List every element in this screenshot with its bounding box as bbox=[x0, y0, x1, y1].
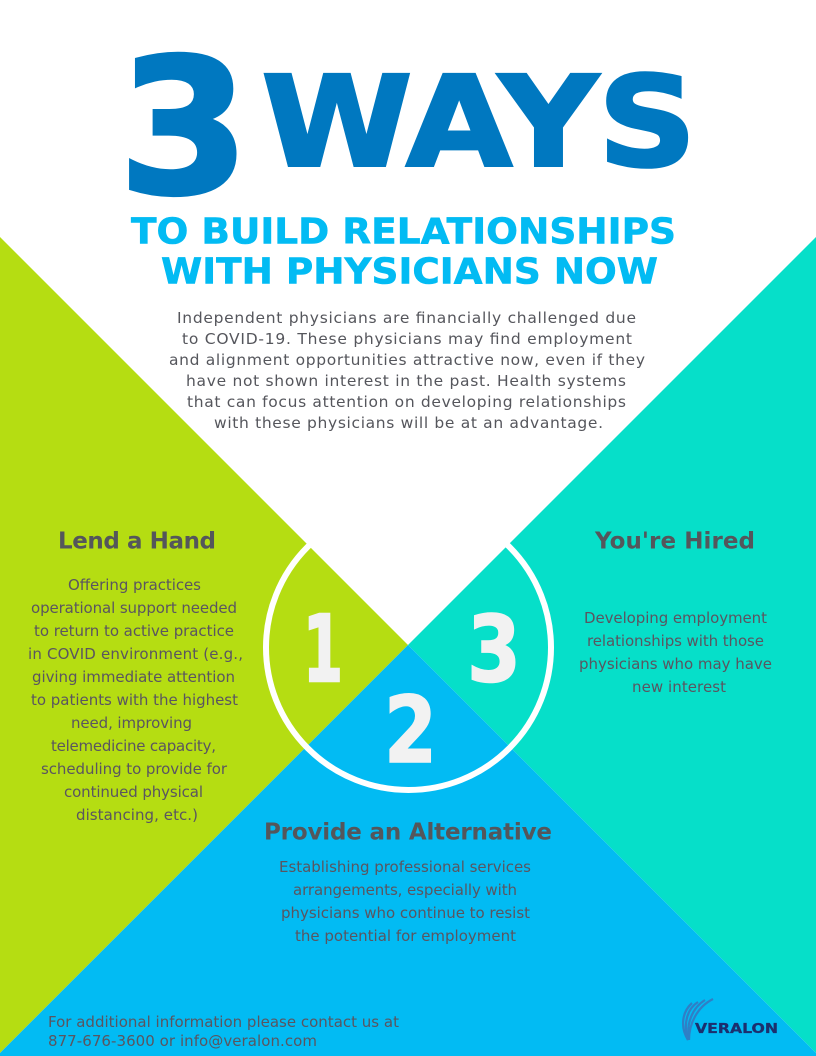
text block: lend a hand: distancing, etc.) bbox=[76, 806, 198, 824]
text block: lend a hand: to patients with the highest bbox=[31, 691, 238, 709]
text block: lend a hand: in COVID environment (e.g., bbox=[28, 645, 243, 663]
text block: you're hired: new interest bbox=[632, 678, 726, 696]
title: 3 ways: 3 bbox=[118, 20, 250, 238]
contact info: 877-676-3600 or info@veralon.com bbox=[48, 1032, 317, 1050]
text block: provide an alternative: Establishing professional services bbox=[279, 858, 531, 876]
text block: lend a hand: giving immediate attention bbox=[32, 668, 235, 686]
text block: lend a hand: need, improving bbox=[71, 714, 192, 732]
contact info: For additional information please contact us at bbox=[48, 1013, 399, 1031]
text block: lend a hand bbox=[28, 576, 243, 824]
text block: provide an alternative: arrangements, especially with bbox=[293, 881, 517, 899]
text block: you're hired: Developing employment bbox=[584, 609, 767, 627]
panel: lend a hand green triangle bbox=[0, 237, 408, 1053]
heading: provide an alternative: Provide an Alternative bbox=[264, 820, 552, 846]
text block: provide an alternative bbox=[279, 858, 531, 945]
text block: lend a hand: to return to active practice bbox=[34, 622, 234, 640]
title: 3 ways: WAYS bbox=[262, 50, 696, 196]
text block: lend a hand: Offering practices bbox=[68, 576, 201, 594]
circle ring bbox=[266, 505, 551, 790]
subtitle: WITH PHYSICIANS NOW bbox=[161, 252, 658, 292]
panel: you're hired turquoise triangle bbox=[408, 237, 816, 1056]
text block: lend a hand: continued physical bbox=[64, 783, 203, 801]
text block: lend a hand: telemedicine capacity, bbox=[51, 737, 216, 755]
intro text block: Independent physicians are financially challenged due bbox=[177, 309, 636, 327]
heading: lend a hand: Lend a Hand bbox=[58, 528, 216, 554]
icon: logo swoosh bbox=[683, 999, 713, 1040]
intro text block: and alignment opportunities attractive now, even if they bbox=[169, 351, 645, 369]
text block: provide an alternative: physicians who continue to resist bbox=[281, 904, 530, 922]
intro text block: with these physicians will be at an advantage. bbox=[214, 414, 603, 432]
title: 3 ways bbox=[118, 20, 696, 238]
contact info bbox=[48, 1013, 399, 1050]
intro text block: have not shown interest in the past. Health systems bbox=[186, 372, 626, 390]
number 1: 1 bbox=[303, 596, 343, 703]
logo: veralon bbox=[683, 999, 778, 1040]
text block: you're hired: relationships with those bbox=[587, 632, 764, 650]
subtitle: TO BUILD RELATIONSHIPS bbox=[131, 212, 676, 252]
text block: provide an alternative: the potential for employment bbox=[295, 927, 516, 945]
intro text block: that can focus attention on developing relationships bbox=[187, 393, 626, 411]
number 3: 3 bbox=[467, 596, 521, 703]
logo wordmark: VERALON bbox=[695, 1021, 778, 1037]
text block: you're hired: physicians who may have bbox=[579, 655, 772, 673]
heading: you're hired: You're Hired bbox=[594, 528, 755, 554]
text block: you're hired bbox=[579, 609, 772, 696]
intro text block bbox=[169, 309, 645, 432]
panel: provide an alternative blue triangle bbox=[0, 645, 816, 1056]
text block: lend a hand: scheduling to provide for bbox=[41, 760, 228, 778]
text block: lend a hand: operational support needed bbox=[31, 599, 237, 617]
subtitle bbox=[131, 212, 676, 292]
intro text block: to COVID-19. These physicians may find employment bbox=[182, 330, 632, 348]
number 2: 2 bbox=[384, 677, 437, 784]
